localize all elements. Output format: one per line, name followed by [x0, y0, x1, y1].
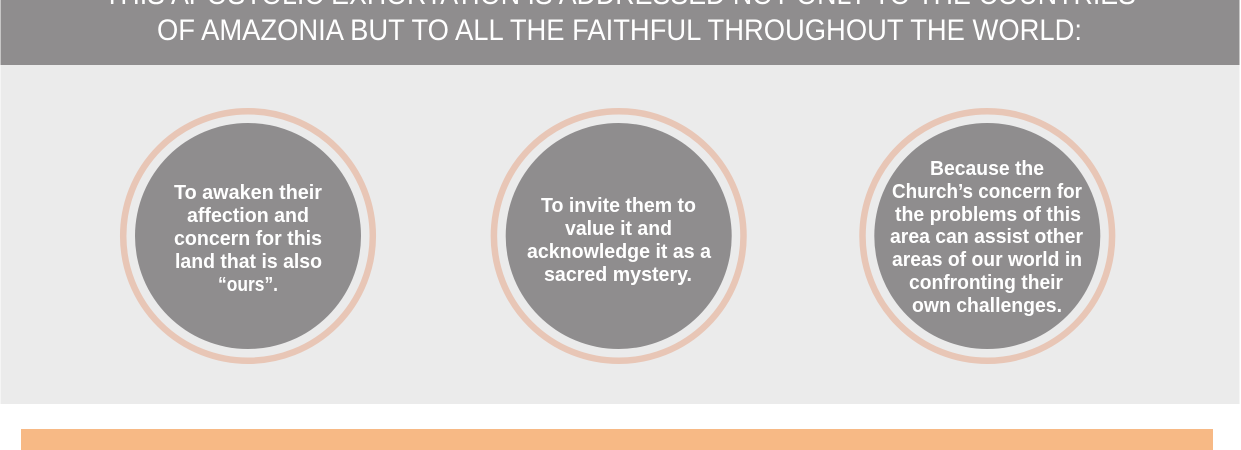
panel: light grey background — [0, 65, 1240, 404]
circle: awaken affection — [123, 111, 373, 361]
text: Church's concern — [890, 158, 1083, 317]
text: awaken affection: affection and — [187, 205, 309, 227]
text: awaken affection — [174, 182, 322, 296]
text: sacred mystery: value it and — [565, 218, 672, 240]
text: sacred mystery: sacred mystery. — [544, 264, 692, 286]
heading text: OF AMAZONIA BUT TO ALL THE FAITHFUL THROUGHOUT THE WORLD: — [157, 14, 1082, 47]
text: awaken affection: land that is also — [175, 251, 322, 273]
text: Church's concern: Because the — [930, 158, 1044, 180]
heading banner — [0, 0, 1240, 65]
text: Church's concern: Church’s concern for — [892, 181, 1082, 203]
text: Church's concern: own challenges. — [912, 295, 1062, 317]
text: sacred mystery: To invite them to — [541, 195, 696, 217]
text: Church's concern: areas of our world in — [892, 249, 1082, 271]
orange bottom panel — [21, 429, 1213, 450]
text: awaken affection: To awaken their — [174, 182, 322, 204]
text: sacred mystery — [527, 195, 712, 286]
text: Church's concern: area can assist other — [890, 226, 1083, 248]
text: Church's concern: confronting their — [909, 272, 1063, 294]
text: sacred mystery: acknowledge it as a — [527, 241, 712, 263]
text: awaken affection: “ours”. — [218, 274, 278, 296]
text: Church's concern: the problems of this — [895, 204, 1081, 226]
circle: Church's concern — [862, 111, 1112, 361]
heading text — [104, 0, 1136, 47]
text: awaken affection: concern for this — [174, 228, 322, 250]
circle: sacred mystery — [494, 111, 744, 361]
